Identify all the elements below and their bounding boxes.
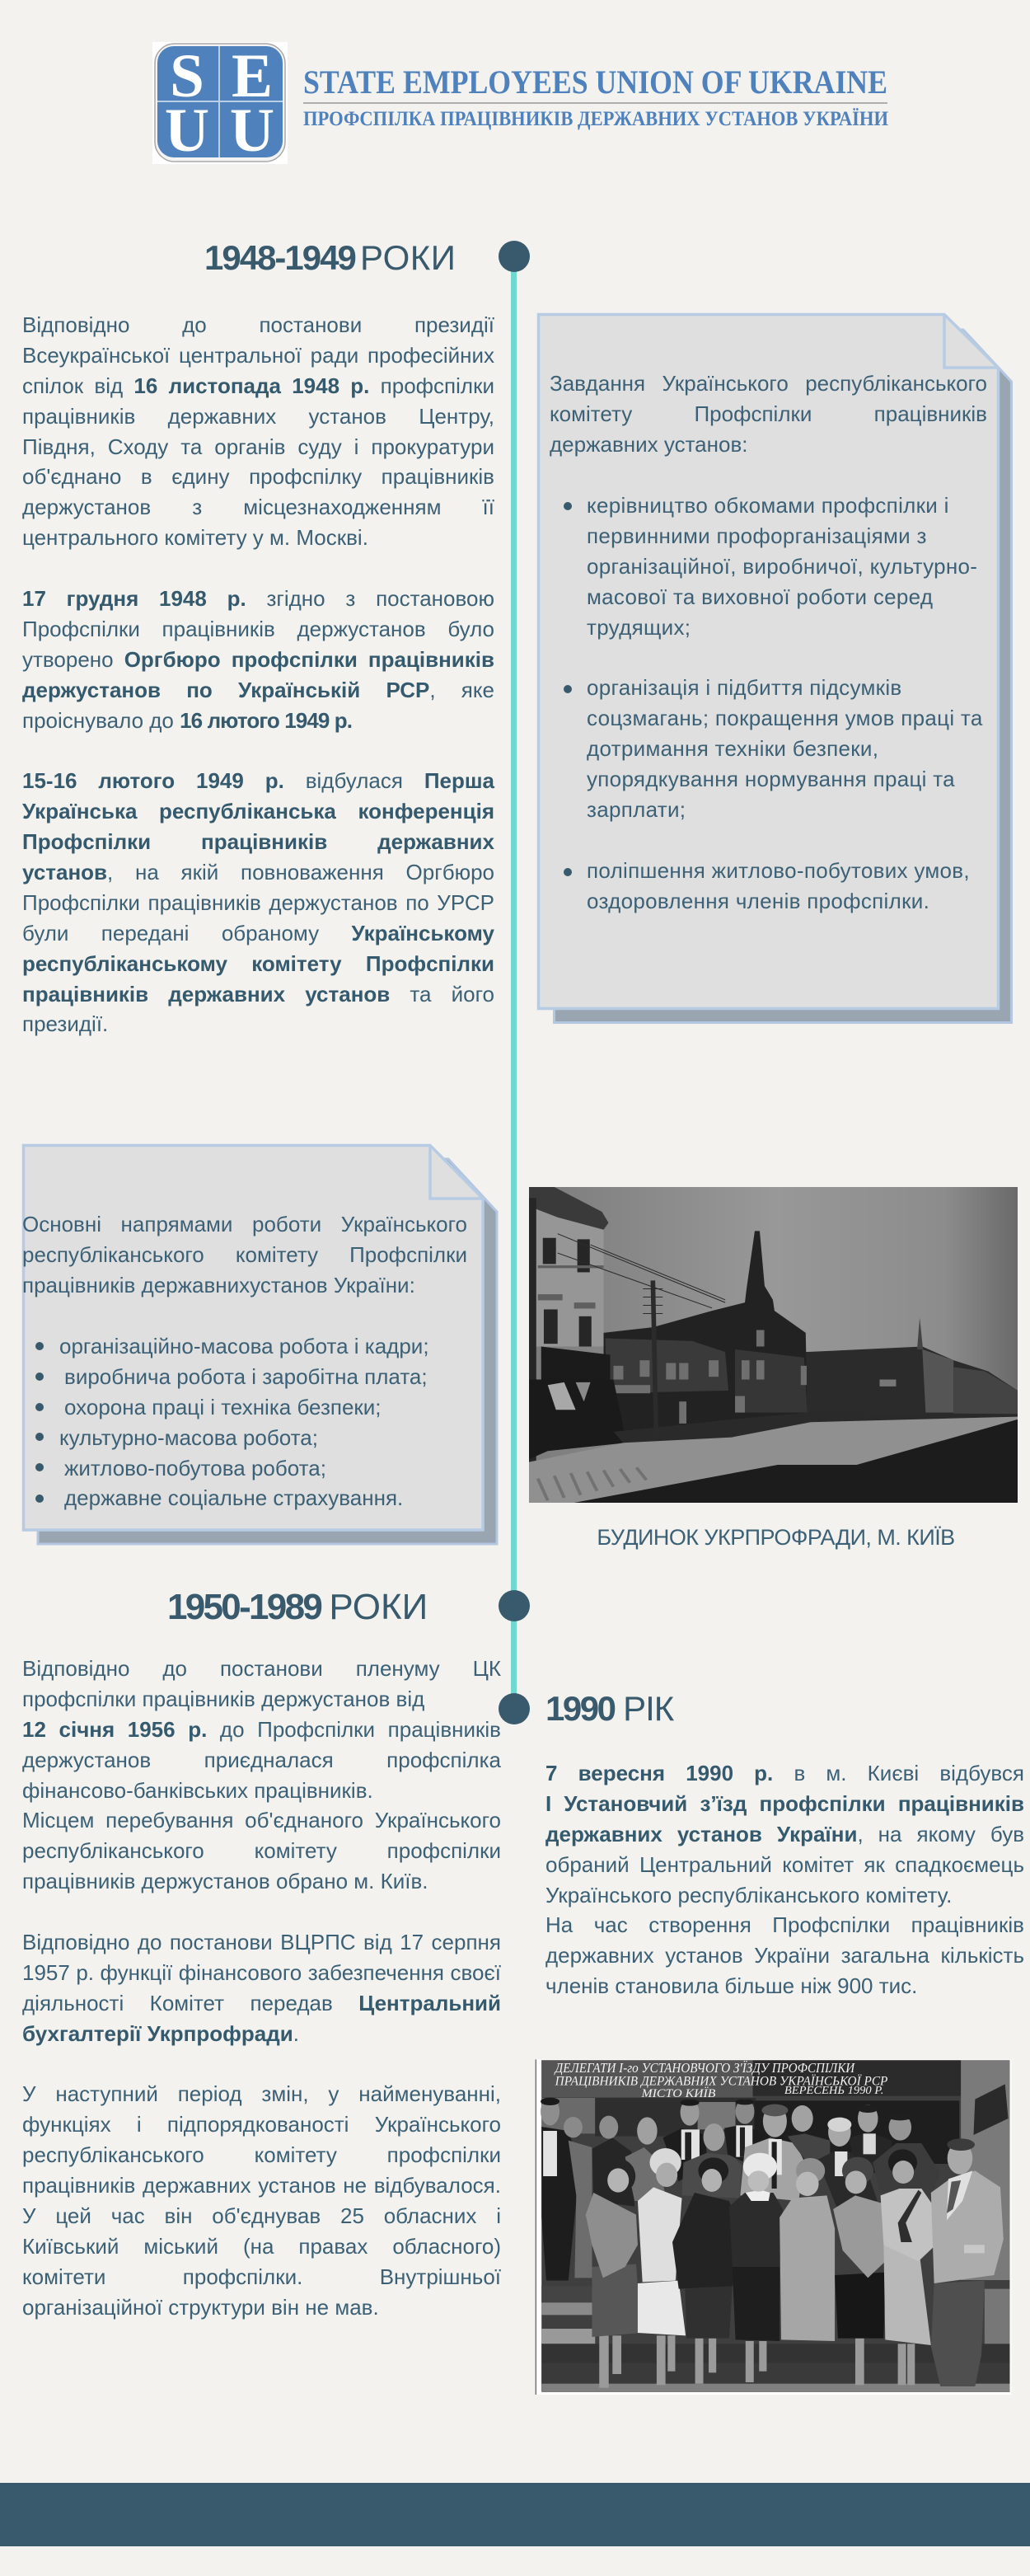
text block: 1950-1989 history: Київський міський (на правах обласного) [22,2234,501,2259]
handwritten photo inscription: МІСТО КИЇВ [641,2086,716,2100]
directions bullet list: культурно-масова робота; [59,1425,318,1450]
text block: 1950-1989 history: республіканського комітету профспілки [22,2142,501,2167]
text block: 1948 history: держустанов з місцезнаходженням її [22,495,494,519]
task bullet list: організація і підбиття підсумків [587,675,902,700]
text block: 1948 history: Відповідно до постанови президії [22,312,494,337]
text block: 1950-1989 history: комітети профспілки. Внутрішньої [22,2264,501,2289]
text block: 1950-1989 history: бухгалтерії Укрпрофради. [22,2021,299,2046]
directions bullet list: виробнича робота і заробітна плата; [64,1364,428,1389]
timeline marker 1948 [499,241,530,272]
text block: 1950-1989 history: держустанов приєдналася профспілка [22,1748,501,1772]
text block: 1948 history: Профспілки працівників державних [22,829,494,854]
logo emblem [152,42,288,164]
text block: 1990 history: 7 вересня 1990 р. в м. Києві відбувся [545,1761,1024,1785]
panel intro text: працівників державнихустанов України: [22,1273,415,1297]
text block: 1948 history: Українська республіканська конференція [22,799,494,823]
text block: 1948 history: утворено Оргбюро профспілки працівників [22,647,494,672]
directions bullet list: житлово-побутова робота; [64,1456,326,1480]
task bullet list: організаційної, виробничої, культурно- [587,554,977,579]
handwritten photo inscription: ДЕЛЕГАТИ І-го УСТАНОВЧОГО З'ЇЗДУ ПРОФСПІЛКИ [554,2060,855,2076]
heading: 1990: 1990 РІК [545,1689,673,1728]
text block: 1990 history: Українського республіканського комітету. [545,1883,952,1907]
front row [586,2138,1004,2388]
text block: 1990 history: обраний Центральний комітет як спадкоємець [545,1852,1024,1877]
text block: 1948 history: були передані обраному Українському [22,921,494,945]
text block: 1948 history: 15-16 лютого 1949 р. відбулася Перша [22,768,494,793]
text block: 1948 history: Профспілки працівників держустанов було [22,617,494,641]
text block: 1948 history: центрального комітету у м. Москві. [22,525,368,550]
task bullet list: соцзмагань; покращення умов праці та [587,706,983,730]
panel intro text [550,371,987,457]
text block: 1950-1989 history: фінансово-банківських працівників. [22,1778,373,1803]
text block: 1948 history: Півдня, Сходу та органів суду і прокуратури [22,434,494,459]
text block: 1990 history: І Установчий з’їзд профспілки працівників [545,1791,1024,1816]
photo: congress delegates 1990 [536,2059,1012,2395]
timeline line [511,256,517,1708]
timeline marker 1990 [499,1693,530,1724]
text block: 1950-1989 history [22,1656,501,2320]
heading: 1948-1949: 1948-1949 РОКИ [204,238,456,277]
text block: 1950-1989 history: працівників державних установ не відбувалося. [22,2173,501,2198]
text block: 1948 history: 17 грудня 1948 р. згідно з постановою [22,586,494,611]
panel intro text [22,1212,467,1297]
text block: 1948 history: спілок від 16 листопада 1948 р. профспілки [22,373,494,398]
text block: 1950-1989 history: У наступний період змін, у найменуванні, [22,2081,501,2106]
task bullet list: поліпшення житлово-побутових умов, [587,858,970,883]
task bullet list: первинними профорганізаціями з [587,523,927,548]
text block: 1950-1989 history: Місцем перебування об'єднаного Українського [22,1808,501,1832]
directions bullet list [59,1334,429,1510]
text block: 1950-1989 history: 1957 р. функції фінансового забезпечення своєї [22,1960,501,1985]
text block: 1948 history: працівників державних установ Центру, [22,404,494,429]
timeline marker 1950 [499,1590,530,1621]
task bullet list: масової та виховної роботи серед [587,584,933,609]
text block: 1948 history: Профспілки працівників держустанов по УРСР [22,890,494,915]
task bullet list: дотримання техніки безпеки, [587,736,878,761]
handwritten photo inscription: ВЕРЕСЕНЬ 1990 Р. [784,2085,883,2097]
text block: 1950-1989 history: 12 січня 1956 р. до Профспілки працівників [22,1717,501,1742]
text block: 1948 history: президії. [22,1011,108,1036]
logo emblem: U [230,96,274,164]
text block: 1950-1989 history: працівників держустанов обрано м. Київ. [22,1869,428,1893]
panel intro text: державних установ: [550,432,748,457]
text block: 1950-1989 history: функціях і підпорядкованості Українського [22,2112,501,2137]
panel: tasks of the committee [537,313,1013,1024]
text block: 1990 history: державних установ України загальна кількість [545,1943,1024,1968]
panel: main directions of work [21,1144,498,1545]
bullets [564,502,572,876]
logo emblem: U [165,96,209,164]
task bullet list: зарплати; [587,797,686,822]
logo emblem: S [170,42,204,110]
text block: 1948 history: об'єднано в єдину профспілку працівників [22,464,494,489]
task bullet list: трудящих; [587,615,691,640]
text block: 1948 history: держустанов по Українській РСР, яке [22,678,494,702]
text block: 1948 history [22,312,494,1036]
text block: 1950-1989 history: діяльності Комітет передав Центральний [22,1991,501,2015]
directions bullet list: організаційно-масова робота і кадри; [59,1334,429,1358]
text block: 1990 history: На час створення Профспілки працівників [545,1912,1024,1937]
organisation name [303,66,888,130]
panel intro text: комітету Профспілки працівників [550,401,987,426]
text block: 1990 history: державних установ України, на якому був [545,1822,1024,1846]
panel intro text: Завдання Українського республіканського [550,371,987,396]
heading: 1950-1989: 1950-1989 РОКИ [167,1587,428,1627]
task bullet list: оздоровлення членів профспілки. [587,889,929,913]
directions bullet list: охорона праці і техніка безпеки; [64,1395,382,1419]
text block: 1990 history: членів становила більше ніж 900 тис. [545,1973,917,1998]
text block: 1950-1989 history: республіканського комітету профспілки [22,1838,501,1863]
bullets [35,1342,44,1503]
handwritten photo inscription: ПРАЦІВНИКІВ ДЕРЖАВНИХ УСТАНОВ УКРАЇНСЬКОЇ РСР [555,2073,887,2088]
text block: 1950-1989 history: Відповідно до постанови пленуму ЦК [22,1656,501,1681]
note shape [537,313,1013,1024]
text block: 1950-1989 history: профспілки працівників держустанов від [22,1687,424,1711]
task bullet list: упорядкування нормування праці та [587,767,955,791]
panel intro text: Основні напрямами роботи Українського [22,1212,467,1236]
text block: 1990 history [545,1761,1024,1998]
directions bullet list: державне соціальне страхування. [64,1485,403,1510]
text block: 1948 history: проіснувало до 16 лютого 1949 р. [22,708,352,733]
text block: 1948 history: працівників державних установ та його [22,982,494,1006]
footer bar [0,2483,1030,2546]
note shape [21,1144,498,1545]
text block: 1948 history: Всеукраїнської центральної ради професійних [22,343,494,368]
text block: 1950-1989 history: У цей час він об'єднував 25 обласних і [22,2203,501,2228]
logo emblem: E [232,42,273,110]
handwritten photo inscription [554,2060,887,2100]
text block: 1948 history: республіканському комітету Профспілки [22,951,494,976]
text block: 1950-1989 history: Відповідно до постанови ВЦРПС від 17 серпня [22,1930,501,1954]
back row men [541,2098,940,2281]
text block: 1950-1989 history: організаційної структури він не мав. [22,2295,379,2320]
photo caption: БУДИНОК УКРПРОФРАДИ, М. КИЇВ [597,1525,955,1550]
task bullet list: керівництво обкомами профспілки і [587,493,949,518]
task bullet list [587,493,983,913]
photo: Ukrprofrada building [529,1187,1018,1503]
text block: 1948 history: установ, на якій повноваження Оргбюро [22,860,494,884]
panel intro text: республіканського комітету Профспілки [22,1242,467,1267]
